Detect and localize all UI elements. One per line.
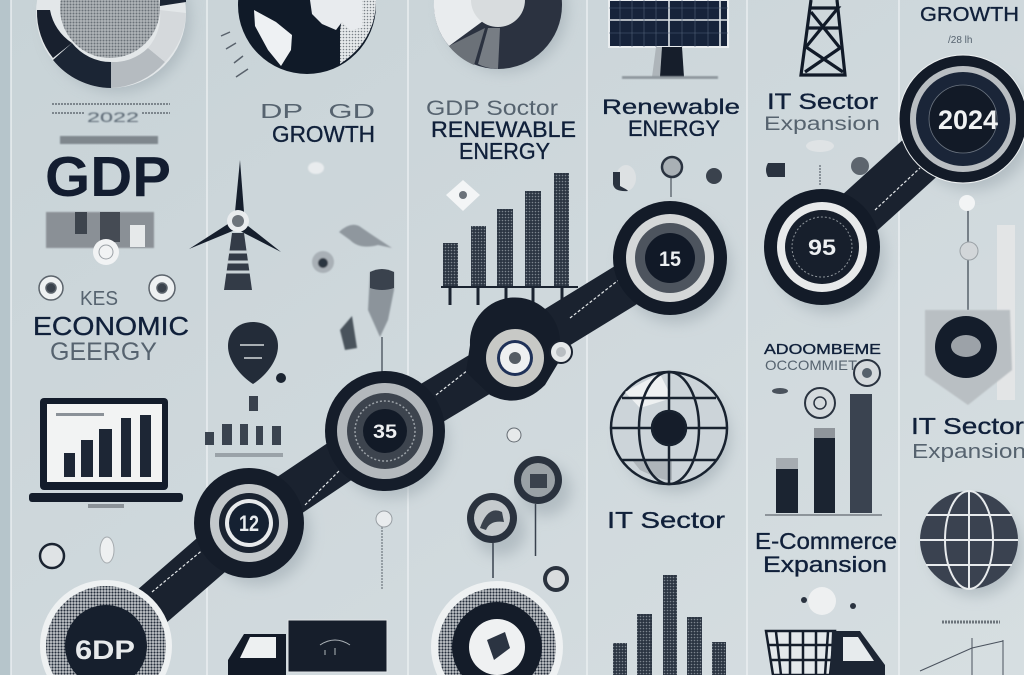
icon: top pie chart xyxy=(434,0,562,69)
icon: solid globe xyxy=(920,491,1018,589)
icon: mini bars row xyxy=(205,424,283,457)
icon: balloon xyxy=(228,322,286,411)
heading: IT sector expansion right: IT Sector xyxy=(911,413,1024,439)
icon: wire globe xyxy=(611,372,727,484)
node: middle hub xyxy=(466,297,572,401)
chart: e-commerce bars xyxy=(765,394,882,516)
node: 12: 12 xyxy=(239,511,259,536)
icon: wind turbine xyxy=(189,160,281,290)
icon: cart truck xyxy=(766,631,885,675)
node: 15: 15 xyxy=(659,248,681,271)
icon: small white cluster xyxy=(801,587,856,615)
node: 95: 95 xyxy=(808,235,836,260)
icon: top globe xyxy=(221,0,376,77)
heading: GDP sector renewable energy: GDP Soctor xyxy=(426,97,558,120)
chart: bottom centre bars xyxy=(613,575,726,675)
heading: key economic energy: ECONOMIC xyxy=(33,311,189,341)
node: 2024 xyxy=(899,55,1024,183)
icon: e-commerce rings xyxy=(772,360,880,418)
heading: year label: 2022 xyxy=(87,109,139,125)
icon: white diamond marker xyxy=(446,180,480,211)
heading: GDP sector renewable energy: RENEWABLE xyxy=(431,117,576,142)
heading: e-commerce label lines: ADOOMBEME xyxy=(764,341,881,358)
heading: key economic energy: GEERGY xyxy=(50,338,157,366)
heading: growth top right: GROWTH xyxy=(920,4,1019,26)
timeline ribbon xyxy=(106,119,963,646)
heading: e-commerce expansion: E-Commerce xyxy=(755,528,897,554)
icon: left small badges xyxy=(39,275,175,301)
icon: photo strip under GDP xyxy=(46,212,154,265)
icon: faint sketches xyxy=(308,162,392,350)
heading: renewable energy xyxy=(602,96,740,141)
icon: transmission tower xyxy=(801,0,845,75)
heading: year label xyxy=(52,104,170,144)
heading: GDP: GDP xyxy=(45,145,171,209)
heading: IT sector lower: IT Sector xyxy=(607,507,725,533)
node: 15 xyxy=(613,201,727,315)
heading: e-commerce expansion: Expansion xyxy=(763,552,887,577)
heading: key economic energy: KES xyxy=(80,288,118,310)
icon: lantern sketch xyxy=(368,269,394,372)
heading: GDP growth: DP GD xyxy=(260,101,375,123)
heading: IT sector expansion upper xyxy=(764,89,880,135)
heading: GDP growth xyxy=(260,101,375,147)
heading: renewable energy: ENERGY xyxy=(628,116,720,141)
heading: key economic energy xyxy=(33,288,189,366)
icon: laptop bar chart xyxy=(29,398,183,508)
node: 35 xyxy=(325,371,445,491)
icon: right spiked dial xyxy=(925,310,1012,405)
heading: GDP sector renewable energy: ENERGY xyxy=(459,138,550,164)
heading: renewable energy: Renewable xyxy=(602,96,740,119)
icon: delivery truck xyxy=(228,620,387,675)
icon: top-left radial dial xyxy=(36,0,186,88)
node: 2024: 2024 xyxy=(938,105,998,135)
heading: IT sector expansion right xyxy=(911,413,1024,463)
node: 12 xyxy=(194,468,304,578)
heading: e-commerce label lines xyxy=(764,341,881,373)
node: GDP xyxy=(40,580,172,675)
node: 35: 35 xyxy=(373,422,397,443)
heading: GDP sector renewable energy xyxy=(426,97,576,164)
node: GDP: 6DP xyxy=(75,635,135,665)
icon: solar panel xyxy=(609,0,728,79)
icon: stacked pins above dial xyxy=(959,195,978,310)
heading: IT sector expansion right: Expansion xyxy=(912,441,1024,463)
heading: e-commerce label lines: OCCOMMIET xyxy=(765,357,857,373)
chart: renewable energy bars xyxy=(441,173,578,305)
chart: small line chart xyxy=(920,622,1003,675)
heading: e-commerce expansion xyxy=(755,528,897,577)
icon: white cylinder xyxy=(997,225,1015,400)
icon: small pin and ring xyxy=(40,537,114,568)
heading: GDP growth: GROWTH xyxy=(272,121,375,147)
icon: centre badges xyxy=(376,428,569,592)
node: bottom centre dial xyxy=(431,581,563,675)
node: 95 xyxy=(764,189,880,305)
heading: IT sector expansion upper: IT Sector xyxy=(767,89,878,114)
heading: IT sector expansion upper: Expansion xyxy=(764,114,880,135)
icon: top-right tiny label: /28 lh xyxy=(948,35,972,46)
icon: small dark marks xyxy=(613,140,869,197)
